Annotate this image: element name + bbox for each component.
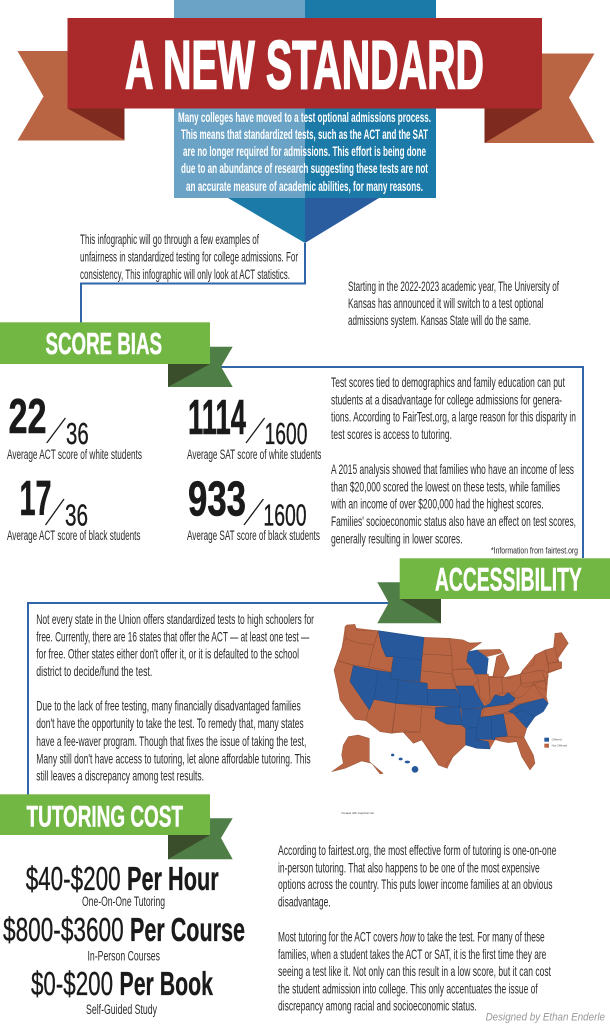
text: tutoring explanation: disadvantage. (278, 894, 331, 910)
title ribbon (18, 18, 594, 143)
text: score bias explanation (330, 374, 576, 546)
cost: per book: $0-$200 (31, 965, 113, 1002)
map credit: Created with mapchart.net (341, 812, 374, 815)
banner: tutoring cost (0, 794, 233, 859)
text: score bias explanation: test scores is access to tutoring. (331, 426, 452, 442)
text: accessibility explanation: Due to the lack of free testing, many financially disadvantaged families (36, 698, 301, 714)
text: accessibility explanation: district to decide/fund the test. (36, 663, 152, 679)
cost: per hour: $40-$200 (26, 860, 121, 897)
map legend (544, 738, 567, 748)
stat: ACT black: 17 (20, 472, 52, 526)
stat: SAT white: Average SAT score of white students (187, 447, 322, 462)
stat: SAT black: Average SAT score of black students (187, 528, 320, 543)
text: accessibility explanation: Many still don't have access to tutoring, let alone affordable tutoring. This (36, 750, 311, 766)
cost: per hour (26, 860, 219, 909)
text: tutoring explanation (278, 842, 557, 1014)
cost: per book: Per Book (120, 965, 213, 1002)
heading: score bias: SCORE BIAS (46, 326, 162, 361)
stat: ACT black: Average ACT score of black students (7, 528, 141, 543)
cost: per course: In-Person Courses (88, 949, 160, 964)
connector: accessibility to tutoring (28, 603, 389, 795)
cost: per course (3, 911, 245, 964)
text: score bias explanation: generally resulting in lower scores. (331, 530, 463, 546)
text: infographic intro (80, 231, 298, 282)
stat: SAT white: 1114 (188, 391, 246, 445)
text: Kansas note (348, 278, 559, 328)
cost: per course: $800-$3600 (3, 911, 124, 948)
intro text (178, 109, 431, 194)
header: blue pennant with intro (174, 0, 436, 243)
intro text: Many colleges have moved to a test optional admissions process. (178, 109, 431, 125)
text: accessibility explanation: still leaves a discrepancy among test results. (36, 768, 204, 784)
cost: per course: Per Course (130, 911, 245, 948)
stat: ACT black (7, 472, 141, 543)
heading: tutoring cost: TUTORING COST (26, 801, 183, 834)
cost: per book: Self-Guided Study (86, 1002, 157, 1017)
stat: SAT white (187, 391, 322, 462)
stat: SAT black: 1600 (263, 498, 307, 533)
stat: SAT black: 933 (188, 473, 246, 527)
map legend: Not Offered (552, 744, 567, 748)
intro text: are no longer required for admissions. This effort is being done (183, 143, 426, 159)
stat: ACT black: 36 (65, 498, 88, 533)
text: infographic intro: consistency, This infographic will only look at ACT statistics. (80, 266, 290, 282)
map legend: Offered (552, 738, 562, 742)
banner: accessibility (377, 558, 610, 623)
banner: score bias (0, 322, 233, 387)
cost: per hour: One-On-One Tutoring (82, 894, 165, 909)
connector: score bias to accessibility (221, 367, 583, 558)
text: accessibility explanation: Not every state in the Union offers standardized tests to high schoolers for (36, 611, 314, 627)
text: tutoring explanation: discrepancy among racial and socioeconomic status. (278, 998, 477, 1014)
connector: header to score bias (81, 243, 305, 323)
stat: ACT white (7, 390, 142, 462)
map: states offering free ACT (332, 624, 568, 815)
text: accessibility explanation: free. Currently, there are 16 states that offer the ACT — at least one test — (36, 628, 309, 644)
text: accessibility explanation: don't have the opportunity to take the test. To remedy that, many states (36, 715, 304, 731)
cost: per hour: Per Hour (127, 860, 219, 897)
source note: *Information from fairtest.org (491, 545, 578, 556)
cost: per book (31, 965, 213, 1017)
text: accessibility explanation: have a fee-waver program. Though that fixes the issue of taking the test, (36, 733, 306, 749)
stat: SAT white: 1600 (265, 416, 307, 451)
intro text: due to an abundance of research suggesting these tests are not (181, 160, 428, 176)
intro text: an accurate measure of academic abilities, for many reasons. (186, 178, 423, 194)
intro text: This means that standardized tests, such as the ACT and the SAT (181, 126, 428, 142)
stat: ACT white: 22 (8, 390, 46, 444)
stat: ACT white: 36 (66, 416, 89, 451)
stat: ACT white: Average ACT score of white students (7, 447, 142, 462)
text: infographic intro: This infographic will go through a few examples of (80, 231, 259, 247)
text: accessibility explanation: for free. Other states either don't offer it, or it is defaulted to the school (36, 646, 299, 662)
stat: SAT black (187, 473, 320, 543)
text: infographic intro: unfairness in standardized testing for college admissions. For (80, 248, 298, 264)
text: accessibility explanation (36, 611, 314, 784)
